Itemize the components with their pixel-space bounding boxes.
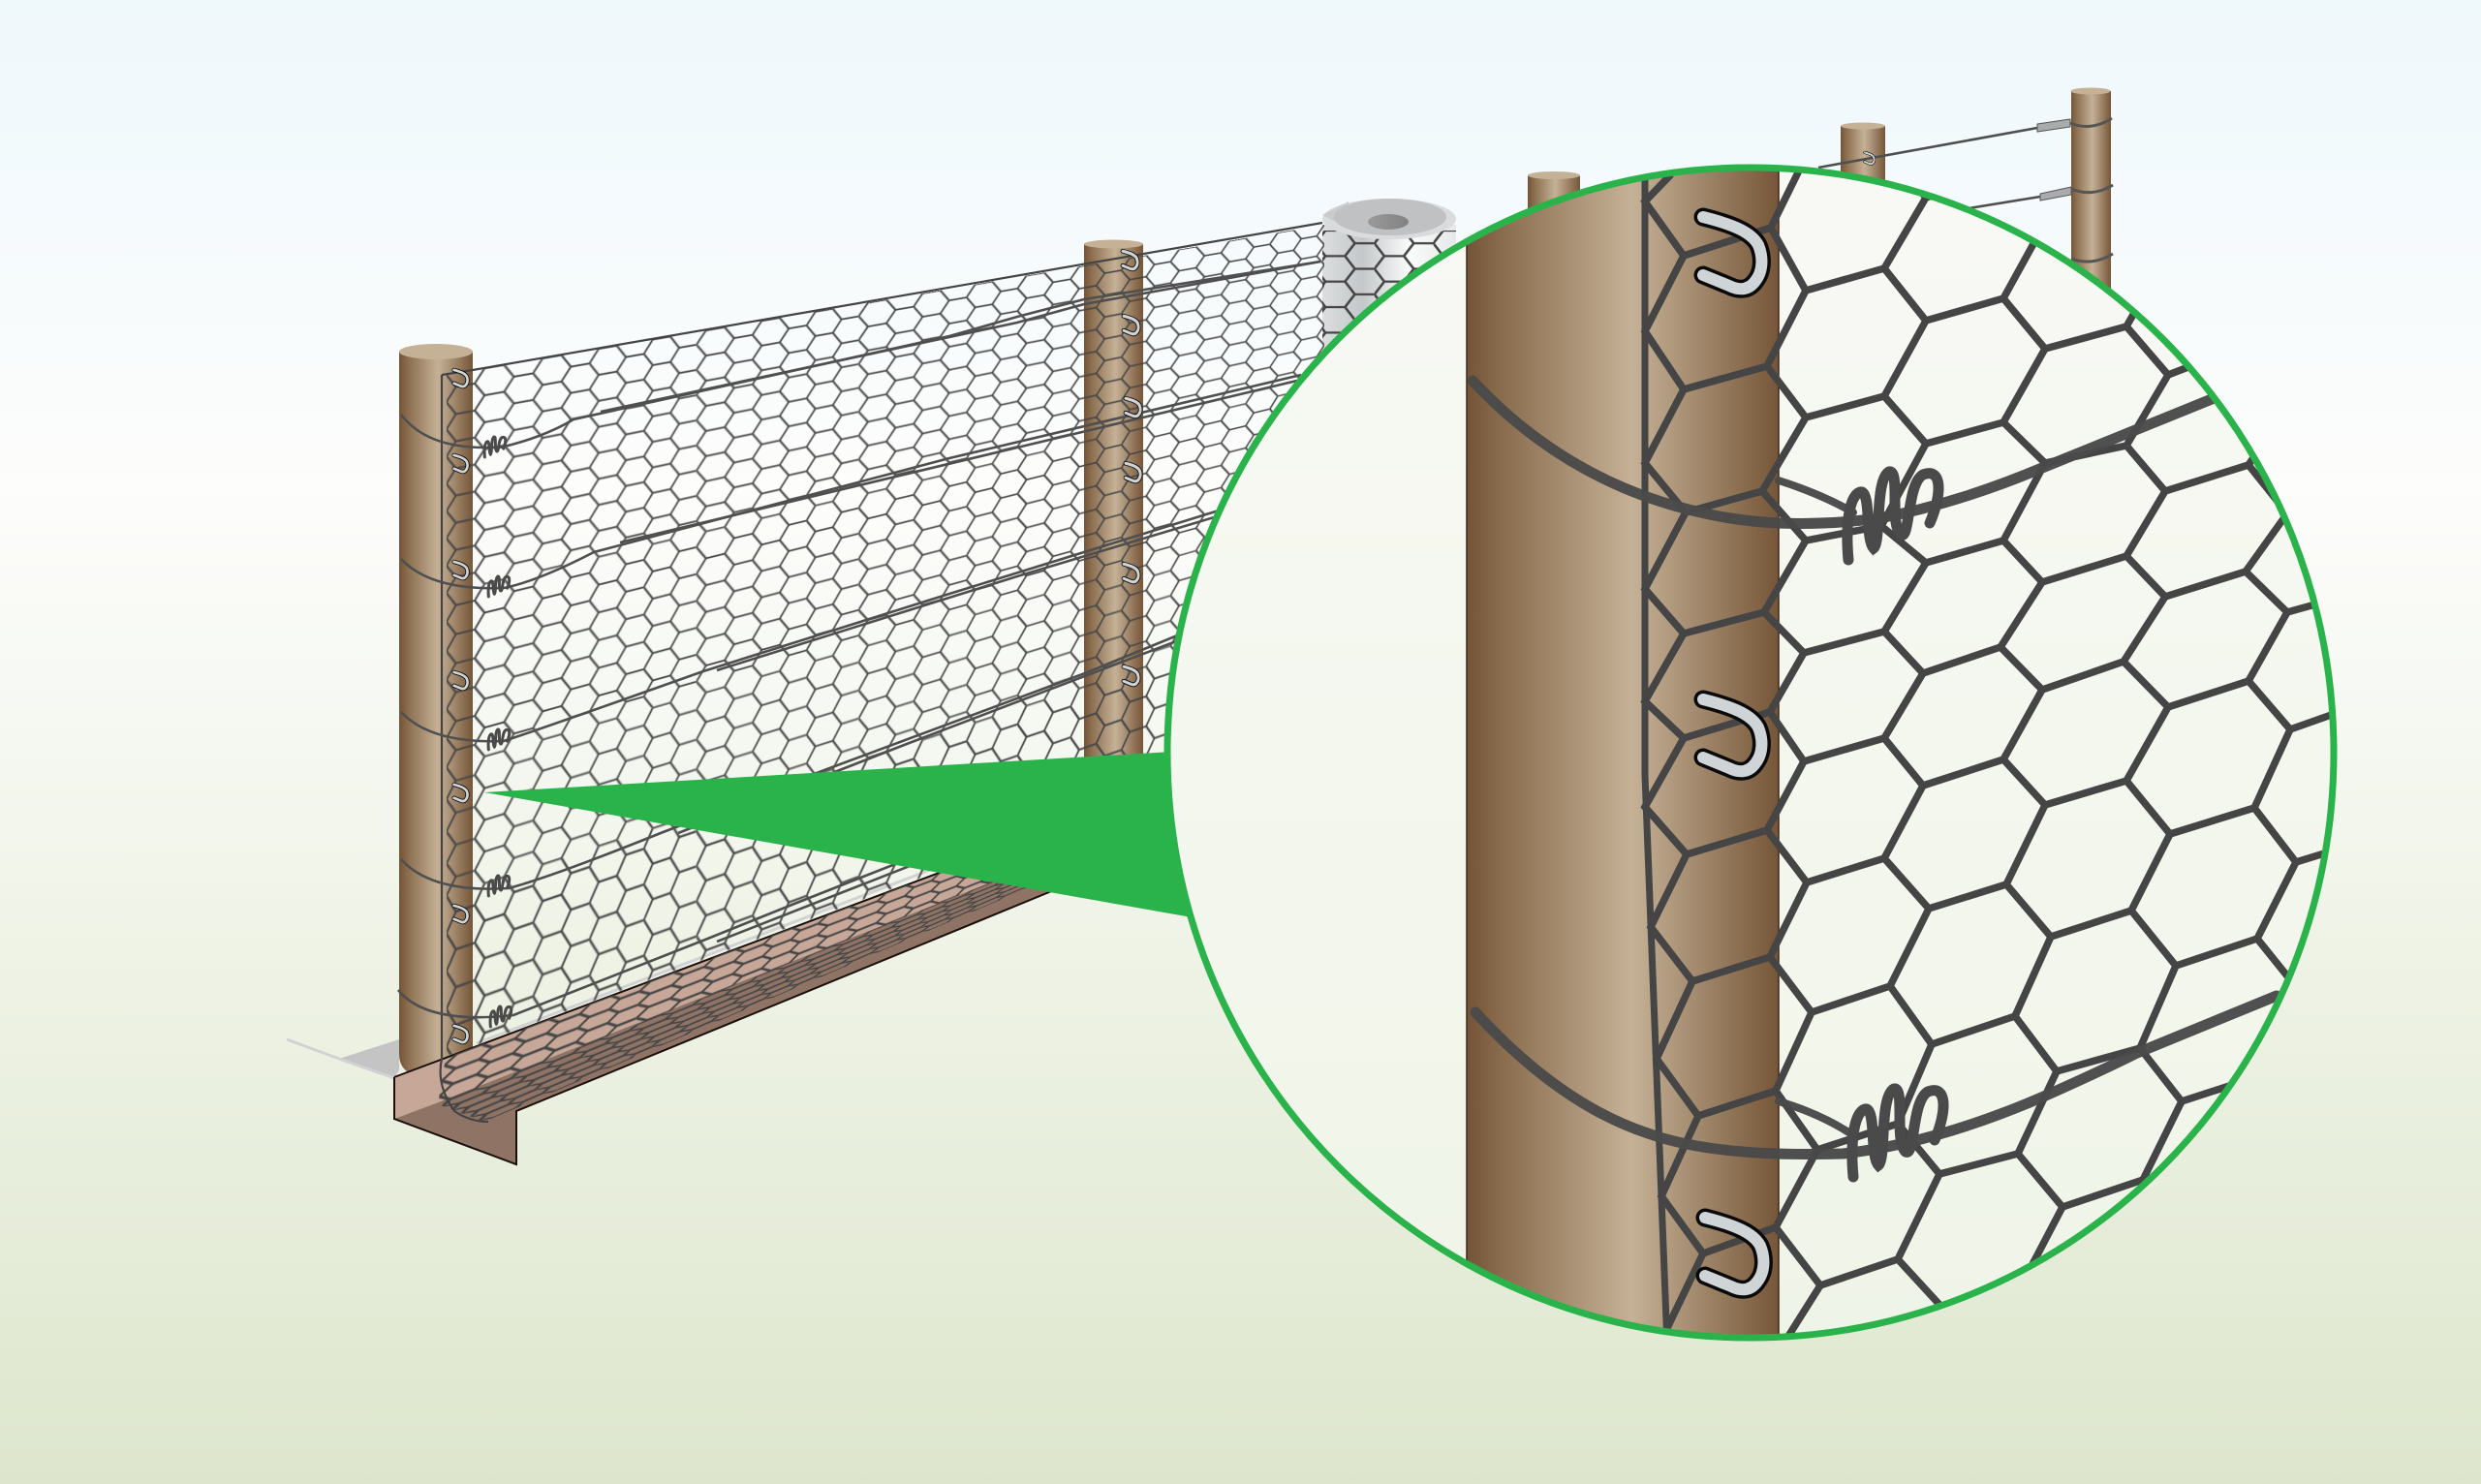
post: first xyxy=(399,344,473,1075)
callout wedge xyxy=(484,752,1192,917)
post: fourth xyxy=(1841,122,1885,320)
trench netting: light wall xyxy=(439,873,992,1100)
far wires and tensioners xyxy=(1818,118,2113,262)
staples: first post xyxy=(454,370,468,1042)
staple: fourth post xyxy=(1865,152,1875,164)
wire knots xyxy=(484,437,512,1027)
ground patch xyxy=(287,1039,399,1078)
magnified knots xyxy=(1847,472,1943,1177)
magnified staples xyxy=(1703,217,1763,1289)
line wires xyxy=(398,262,1320,1017)
overlay: wires, staples, callout and magnified view xyxy=(397,151,2337,1341)
post: second xyxy=(1084,240,1143,864)
netting top wire and side edge xyxy=(441,223,1322,1122)
hexagonal netting on fence xyxy=(447,225,1324,1056)
magnified netting xyxy=(1640,172,2329,1333)
trench netting: dark floor xyxy=(442,881,1027,1120)
trench xyxy=(394,825,1066,1164)
magnified wires xyxy=(1473,381,2277,1155)
post: far right xyxy=(2071,87,2111,498)
magnifier ring xyxy=(1167,168,2334,1338)
wire roll xyxy=(1322,199,1456,409)
staples: second post xyxy=(1123,251,1140,685)
magnified view xyxy=(1164,165,2337,1341)
post: third xyxy=(1528,171,1580,330)
